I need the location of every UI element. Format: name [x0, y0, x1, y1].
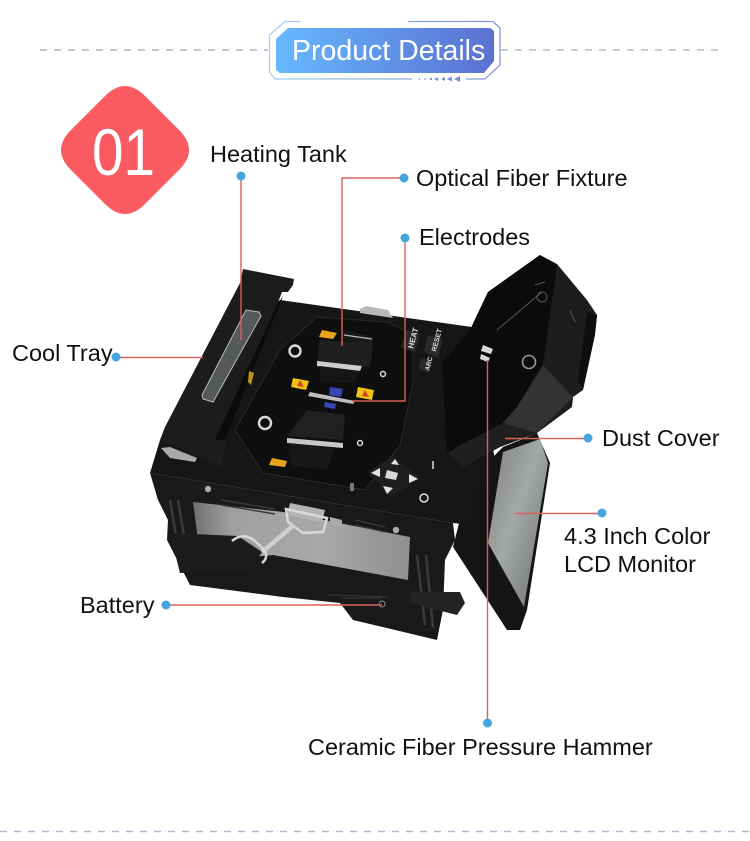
control buttons: RESET — [431, 327, 444, 353]
label: Cool Tray: Cool Tray — [12, 340, 113, 366]
fiber fixtures, upper and lower — [287, 330, 373, 470]
leader: Electrodes — [352, 234, 410, 401]
control buttons: ARC — [424, 356, 435, 372]
label: Heating Tank: Heating Tank — [210, 141, 347, 167]
number badge 01: 01 — [92, 115, 155, 189]
number badge 01 — [61, 86, 189, 214]
dust cover — [442, 255, 597, 467]
label: Optical Fiber Fixture: Optical Fiber Fixture — [416, 165, 628, 191]
leader: Heating Tank — [236, 172, 246, 340]
LCD monitor — [453, 433, 550, 630]
fusion splicer device illustration — [150, 255, 597, 640]
label: Battery: Battery — [80, 592, 155, 618]
front frame and handle — [150, 473, 465, 640]
main body top face — [150, 300, 495, 525]
footer dashed divider — [0, 830, 750, 832]
yellow warning labels and blue clamps — [269, 330, 374, 467]
label: Ceramic Fiber Pressure Hammer: Ceramic Fiber Pressure Hammer — [308, 734, 653, 760]
leader: Optical Fiber Fixture — [342, 174, 408, 346]
navigation keypad — [350, 456, 433, 502]
heating tank tray cover — [160, 269, 294, 467]
title banner: Product Details: Product Details — [292, 35, 485, 67]
control buttons: HEAT — [406, 327, 420, 350]
label: Electrodes: Electrodes — [419, 224, 530, 250]
round screws — [259, 346, 386, 446]
leader: Dust Cover — [505, 434, 592, 442]
control buttons — [401, 327, 444, 373]
leader: LCD Monitor — [515, 508, 606, 518]
header dashed divider — [40, 49, 722, 51]
label: 4.3 Inch Color LCD Monitor: LCD Monitor — [564, 551, 696, 577]
leader: Battery — [162, 600, 382, 610]
label: 4.3 Inch Color LCD Monitor: 4.3 Inch Color — [564, 523, 710, 549]
title banner: Product Details — [270, 22, 500, 82]
metal latch and strap — [170, 503, 342, 573]
label: Dust Cover: Dust Cover — [602, 425, 720, 451]
leader: Cool Tray — [112, 352, 203, 362]
leader: Ceramic Fiber Pressure Hammer — [483, 360, 492, 728]
